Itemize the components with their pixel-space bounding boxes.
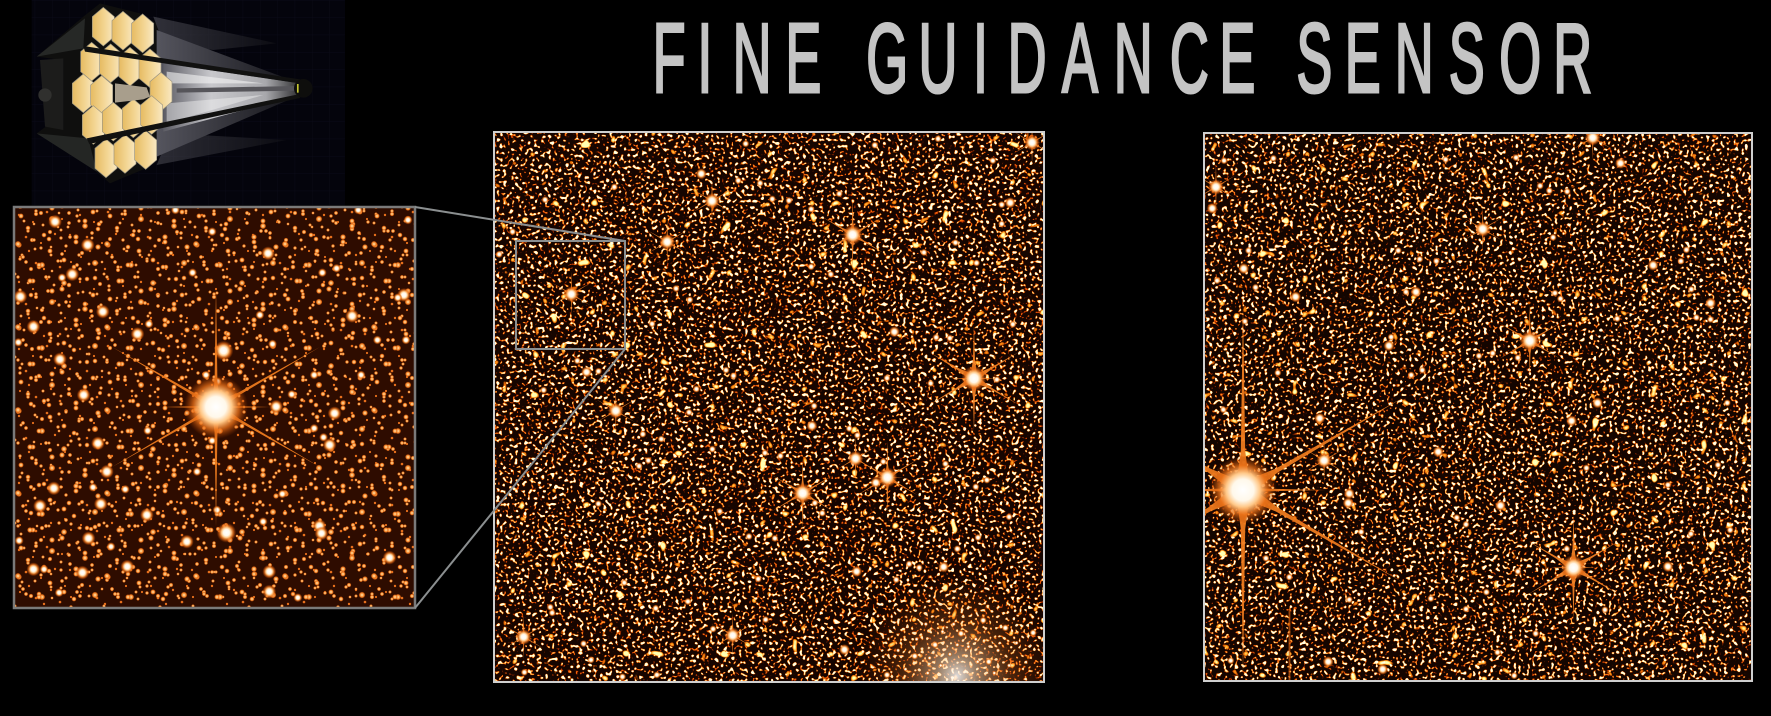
panel: zoomed star inset <box>13 205 415 608</box>
inset bright stars <box>13 205 412 602</box>
star cluster glow <box>857 576 1044 682</box>
main field bright stars <box>496 120 1051 681</box>
inset central star with diffraction spikes <box>112 287 320 527</box>
panel: right star field <box>1203 132 1753 682</box>
right field bright stars <box>1083 115 1734 681</box>
title: FINE GUIDANCE SENSOR <box>653 3 1592 113</box>
panel: main star field <box>494 120 1051 682</box>
callout: zoom box and connector lines <box>415 207 625 608</box>
icon: webb telescope illustration <box>32 0 345 205</box>
right field large star with long spikes <box>1205 306 1402 674</box>
